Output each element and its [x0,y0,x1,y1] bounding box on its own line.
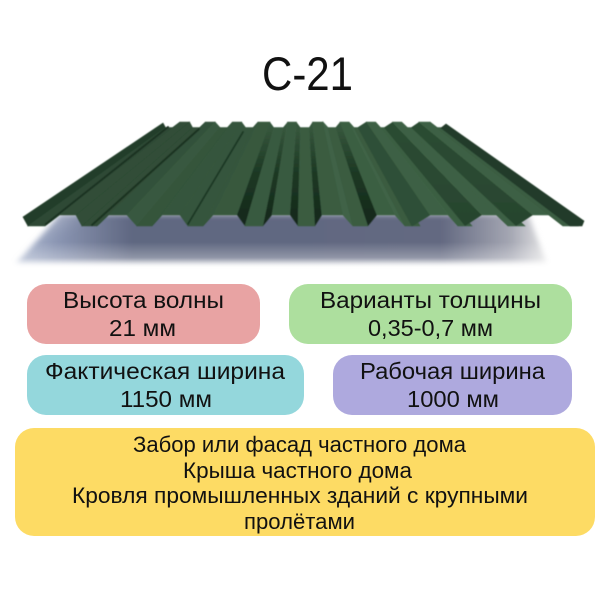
panel: working width: Рабочая ширина [360,358,546,384]
panel: wave height [27,284,260,344]
panel: applications: пролётами [244,509,355,534]
panel: working width [333,355,572,415]
dark groove lines [46,127,243,225]
shadow under sheet [0,205,560,274]
panel: applications [15,428,595,536]
panel: wave height: Высота волны [63,287,224,313]
panel: working width: 1000 мм [407,386,499,412]
panel: thickness options [289,284,572,344]
panel: actual width: Фактическая ширина [45,358,286,384]
panel: thickness options: Варианты толщины [320,287,541,313]
panel: applications: Забор или фасад частного дома [133,432,466,457]
panel: wave height: 21 мм [109,315,176,341]
panel: thickness options: 0,35-0,7 мм [368,315,493,341]
title: С-21 [262,47,353,100]
panel: actual width: 1150 мм [120,386,212,412]
corrugated green sheet [23,122,584,226]
panel: applications: Кровля промышленных зданий с крупными [72,483,528,508]
panel: applications: Крыша частного дома [183,458,412,483]
panel: actual width [27,355,304,415]
